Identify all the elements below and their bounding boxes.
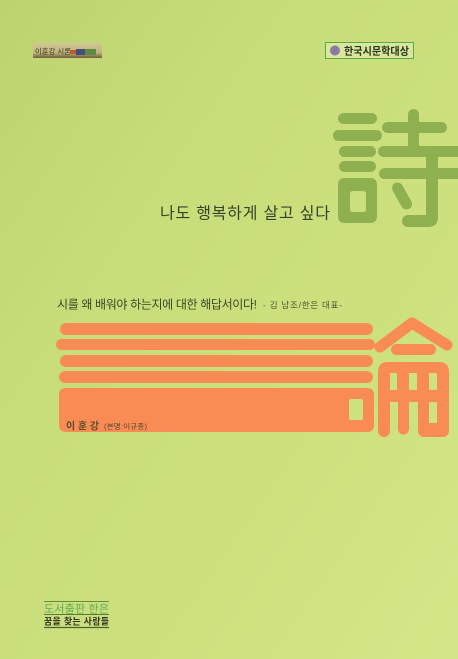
tagline: 시를 왜 배워야 하는지에 대한 해답서이다! — [57, 298, 257, 312]
badge text: 한국시문학대상 — [344, 44, 409, 58]
author real name: (본명:이규종) — [104, 421, 148, 431]
publisher slogan: 꿈을 찾는 사람들 — [44, 616, 109, 626]
book title: 나도 행복하게 살고 싶다 — [160, 204, 330, 222]
series label tag: 이훈강 시론 — [35, 46, 71, 56]
award badge — [326, 42, 414, 58]
large orange character: 論 — [56, 323, 449, 437]
tagline attribution: - 김 남조/한은 대표- — [263, 300, 342, 310]
large green character: 詩 — [333, 109, 458, 227]
publisher block — [44, 602, 109, 628]
icon: award seal — [330, 46, 340, 56]
series label tag — [33, 43, 102, 58]
publisher name: 도서출판 한은 — [44, 602, 109, 616]
author name: 이 훈 강 — [66, 420, 99, 432]
